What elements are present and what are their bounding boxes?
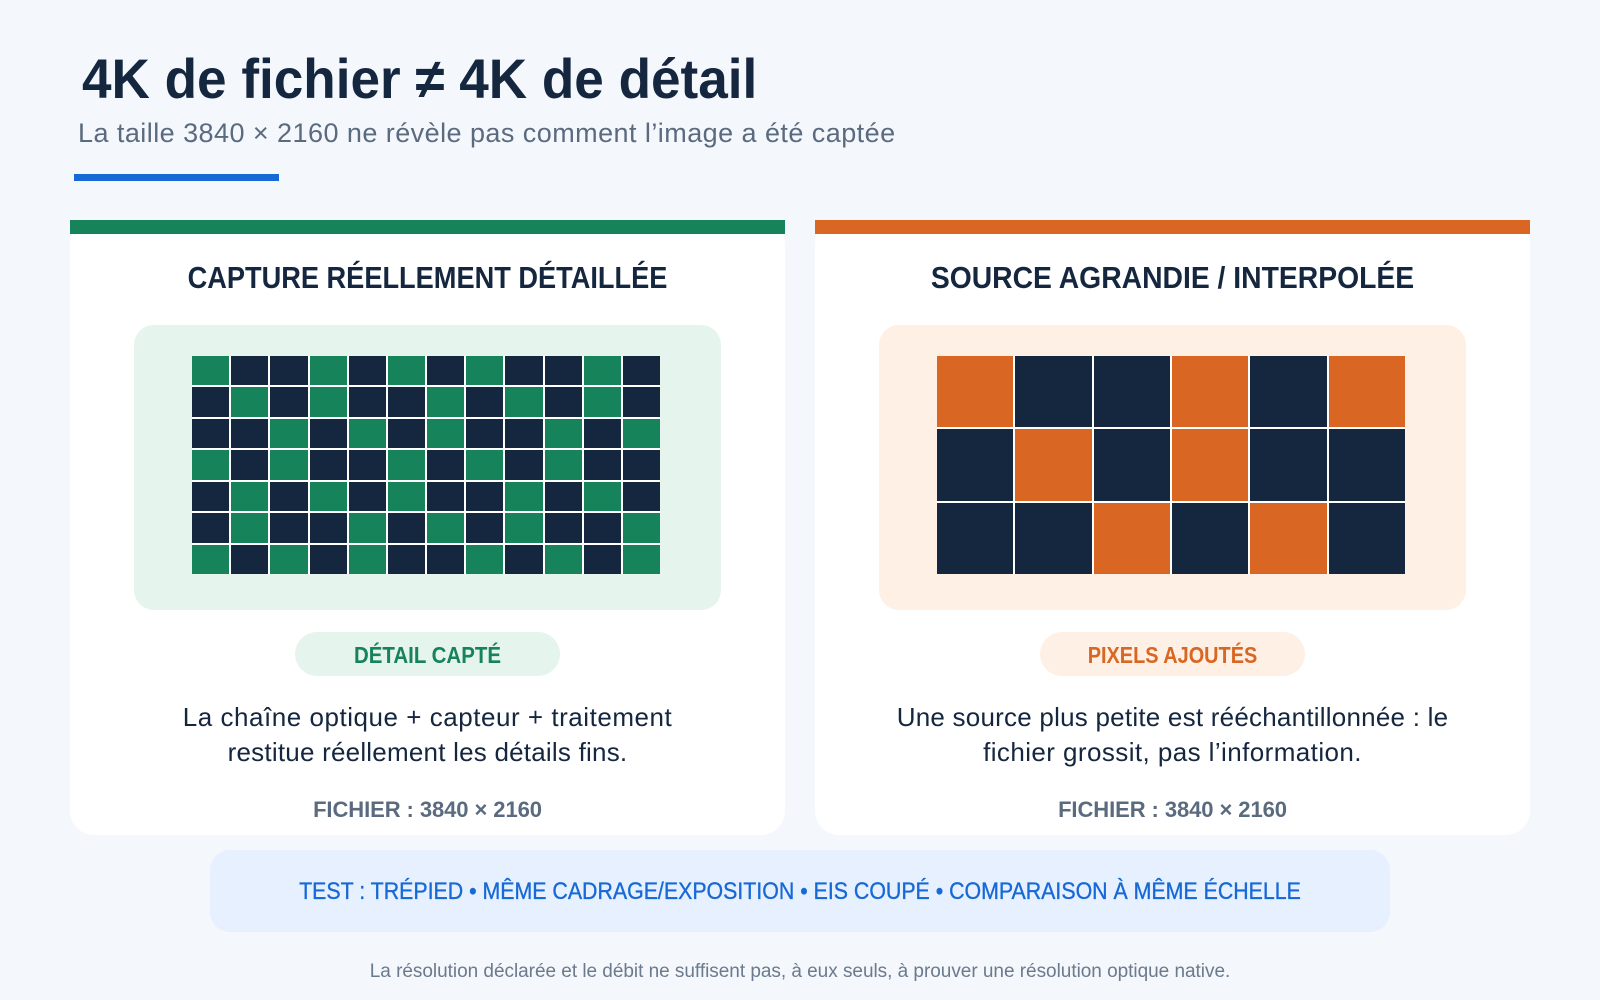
panel heading: upscaled source: SOURCE AGRANDIE / INTERPOLÉE [931, 260, 1414, 295]
footnote: La résolution déclarée et le débit ne suffisent pas, à eux seuls, à prouver une résolution optique native. [370, 961, 1230, 982]
panel: real capture [70, 220, 785, 835]
pill label: captured detail: DÉTAIL CAPTÉ [354, 642, 501, 668]
file size label: FICHIER : 3840 × 2160 [1058, 797, 1287, 822]
pill label: added pixels: PIXELS AJOUTÉS [1088, 642, 1257, 668]
description line 1: Une source plus petite est rééchantillonnée : le [897, 702, 1448, 732]
description line 2: restitue réellement les détails fins. [228, 737, 627, 767]
panel: upscaled source [815, 220, 1530, 835]
description: upscaled source [897, 702, 1448, 767]
panel heading: real capture: CAPTURE RÉELLEMENT DÉTAILLÉE [188, 260, 667, 295]
banner: test protocol [210, 850, 1390, 932]
pill: captured detail [295, 632, 560, 676]
pixel visual: coarse grid [879, 325, 1466, 610]
file size label: FICHIER : 3840 × 2160 [313, 797, 542, 822]
accent rule [74, 174, 279, 181]
grid: 12 × 7 fine pixels [192, 356, 660, 574]
pill: added pixels [1040, 632, 1305, 676]
description: real capture [183, 702, 672, 767]
title: 4K de fichier ≠ 4K de détail [82, 47, 757, 110]
panel top bar: green [70, 220, 785, 234]
panel top bar: orange [815, 220, 1530, 234]
banner text: TEST : TRÉPIED • MÊME CADRAGE/EXPOSITION • EIS COUPÉ • COMPARAISON À MÊME ÉCHELLE [299, 878, 1301, 905]
subtitle: La taille 3840 × 2160 ne révèle pas comment l’image a été captée [78, 118, 896, 148]
pixel visual: fine detail grid [134, 325, 721, 610]
grid: 6 × 3 coarse pixels [937, 356, 1405, 574]
description line 2: fichier grossit, pas l’information. [983, 737, 1362, 767]
description line 1: La chaîne optique + capteur + traitement [183, 702, 672, 732]
